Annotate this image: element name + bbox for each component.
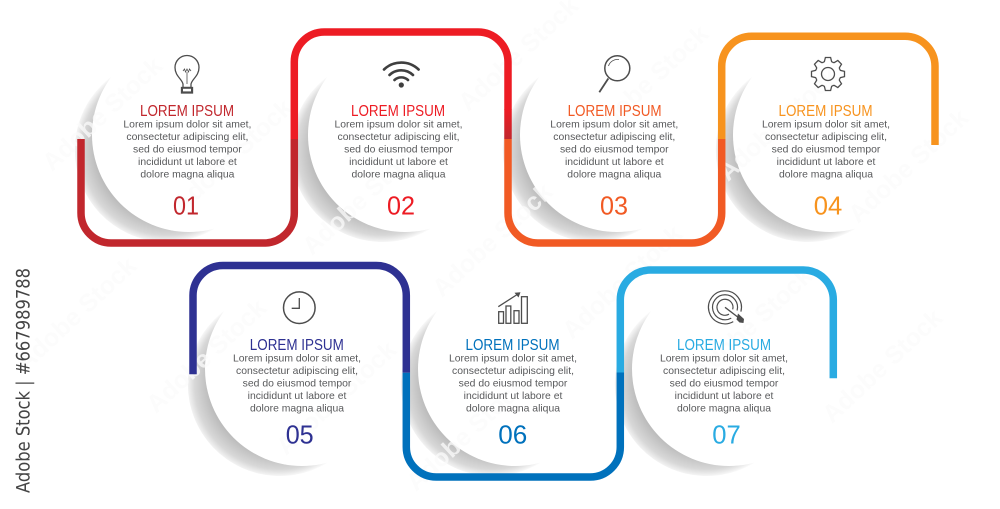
panel: step 04 — [722, 36, 935, 220]
number: 03 — [600, 190, 628, 220]
text block: incididunt ut labore et — [464, 391, 562, 402]
text block: sed do eiusmod tempor — [772, 145, 881, 156]
text block: sed do eiusmod tempor — [243, 378, 352, 390]
text block: dolore magna aliqua — [567, 170, 662, 181]
text block: consectetur adipiscing elit, — [452, 366, 574, 377]
text block: consectetur adipiscing elit, — [236, 366, 358, 377]
heading: LOREM IPSUM — [140, 103, 234, 120]
text block: dolore magna aliqua — [352, 170, 446, 181]
paper circle with shadow: step 01 — [75, 38, 286, 242]
text block — [334, 120, 462, 181]
heading: LOREM IPSUM — [778, 103, 872, 120]
icon: growth chart — [498, 292, 527, 323]
icon: gear — [812, 58, 844, 90]
text block: dolore magna aliqua — [779, 170, 873, 181]
panel: step 02 — [294, 32, 508, 220]
text block: incididunt ut labore et — [349, 157, 448, 168]
paper circle with shadow: step 07 — [615, 272, 826, 476]
stock watermark pattern: Adobe Stock — [401, 372, 532, 496]
stock watermark pattern: Adobe Stock — [297, 136, 428, 260]
stock watermark pattern: Adobe Stock — [817, 304, 948, 428]
paper circle with shadow: step 06 — [401, 272, 612, 476]
number: 02 — [387, 190, 415, 220]
stock watermark pattern: Adobe Stock — [427, 178, 558, 302]
heading: LOREM IPSUM — [351, 103, 445, 120]
number: 07 — [712, 419, 741, 449]
stock watermark pattern: Adobe Stock — [557, 220, 688, 344]
connector line: blue — [406, 372, 620, 477]
text block: dolore magna aliqua — [250, 403, 344, 414]
text block: dolore magna aliqua — [140, 170, 235, 181]
text block: dolore magna aliqua — [677, 403, 771, 414]
connector line: red — [294, 32, 508, 139]
panel: step 05 — [193, 266, 406, 449]
stock watermark pattern: Adobe Stock — [11, 252, 142, 376]
text block: incididunt ut labore et — [565, 157, 664, 168]
stock watermark pattern: Adobe Stock — [167, 94, 298, 218]
text block — [449, 354, 577, 414]
text block: Lorem ipsum dolor sit amet, — [660, 354, 788, 364]
text block: Lorem ipsum dolor sit amet, — [550, 120, 678, 131]
text block: Lorem ipsum dolor sit amet, — [233, 354, 361, 364]
text block — [123, 120, 251, 181]
panel: step 07 — [620, 270, 833, 449]
text block — [233, 354, 361, 414]
number: 04 — [814, 190, 842, 220]
text block: incididunt ut labore et — [138, 157, 237, 168]
stock watermark pattern: Adobe Stock — [141, 294, 272, 418]
text block: consectetur adipiscing elit, — [337, 132, 460, 143]
connector line: navy — [193, 266, 406, 374]
heading: LOREM IPSUM — [466, 337, 560, 354]
text block: dolore magna aliqua — [466, 403, 560, 414]
number: 05 — [286, 419, 314, 449]
text block: sed do eiusmod tempor — [344, 145, 453, 156]
text block: Lorem ipsum dolor sit amet, — [334, 120, 462, 131]
connector line: orange — [722, 36, 935, 145]
text block: consectetur adipiscing elit, — [553, 132, 675, 143]
panel: step 06 — [406, 292, 620, 477]
stock watermark pattern: Adobe Stock — [843, 104, 974, 228]
stock watermark pattern: Adobe Stock — [583, 20, 714, 144]
text block: consectetur adipiscing elit, — [126, 132, 248, 143]
paper circle with shadow: step 04 — [716, 38, 927, 242]
stock watermark pattern: Adobe Stock — [37, 52, 168, 176]
connector line: red orange — [508, 139, 722, 243]
text block: sed do eiusmod tempor — [133, 145, 242, 156]
text block — [550, 120, 678, 181]
icon: clock — [284, 292, 315, 324]
paper circle with shadow: step 02 — [291, 38, 502, 242]
text block: sed do eiusmod tempor — [560, 145, 669, 156]
icon: magnifier — [599, 56, 630, 92]
text block: consectetur adipiscing elit, — [663, 366, 785, 377]
heading: LOREM IPSUM — [568, 103, 662, 120]
text block: incididunt ut labore et — [675, 391, 773, 402]
text block: Lorem ipsum dolor sit amet, — [762, 120, 890, 131]
heading: LOREM IPSUM — [677, 337, 771, 354]
heading: LOREM IPSUM — [250, 337, 344, 354]
stock watermark pattern: Adobe Stock — [713, 62, 844, 186]
connector line: light blue — [620, 270, 833, 378]
stock watermark pattern: Adobe Stock — [271, 336, 402, 460]
text block: incididunt ut labore et — [777, 157, 875, 168]
icon: target — [708, 291, 744, 324]
number: 01 — [173, 190, 199, 220]
icon: light bulb — [175, 56, 199, 93]
paper circle with shadow: step 05 — [188, 272, 399, 476]
paper circle with shadow: step 03 — [503, 38, 714, 242]
icon: wifi — [384, 63, 419, 88]
text block: incididunt ut labore et — [248, 391, 346, 402]
stock watermark pattern: Adobe Stock — [687, 262, 818, 386]
stock id label: Adobe Stock | #667989788 — [12, 268, 34, 493]
connector line: dark red — [81, 139, 294, 243]
panel: step 03 — [508, 56, 722, 243]
text block: sed do eiusmod tempor — [670, 378, 779, 390]
panel: step 01 — [81, 56, 294, 243]
number: 06 — [498, 419, 527, 449]
text block: consectetur adipiscing elit, — [765, 132, 887, 143]
text block — [660, 354, 788, 414]
text block: Lorem ipsum dolor sit amet, — [449, 354, 577, 364]
text block: Lorem ipsum dolor sit amet, — [123, 120, 251, 131]
text block: sed do eiusmod tempor — [459, 378, 568, 390]
text block — [762, 120, 890, 181]
